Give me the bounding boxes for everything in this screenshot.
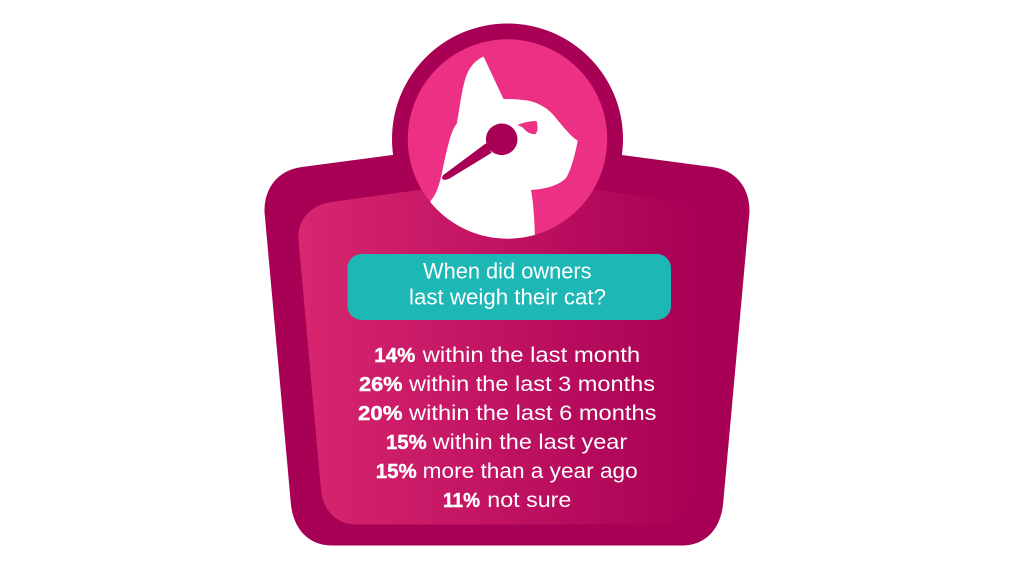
heading text line 2: last weigh their cat? <box>409 284 606 310</box>
panel: inner gradient shield <box>298 190 715 524</box>
heading text line 1: When did owners <box>423 258 592 284</box>
stat: 15% within the last year: within the last year <box>432 431 627 454</box>
stat: 11% not sure <box>443 489 571 512</box>
stat: 15% within the last year: 15% <box>386 431 427 454</box>
stat: 26% within the last 3 months: 26% <box>359 373 402 396</box>
stat list <box>358 344 656 512</box>
stat: 20% within the last 6 months: 20% <box>358 402 402 425</box>
icon: cat silhouette <box>430 56 578 239</box>
stat: 11% not sure: not sure <box>487 489 571 512</box>
heading box <box>348 254 671 320</box>
stat: 15% more than a year ago: more than a year ago <box>423 460 638 483</box>
stat: 14% within the last month: 14% <box>374 344 415 367</box>
circle: pink background <box>408 39 607 239</box>
stat: 20% within the last 6 months: within the last 6 months <box>408 402 656 425</box>
stat: 26% within the last 3 months: within the last 3 months <box>408 373 655 396</box>
icon: scale dial and needle <box>442 124 518 180</box>
icon: cat with weighing scale dial <box>408 39 607 250</box>
panel: outer shield <box>264 155 750 546</box>
stat: 14% within the last month: within the last month <box>422 344 640 367</box>
stat: 11% not sure: 11% <box>443 489 480 512</box>
circle: dark ring <box>392 24 623 254</box>
icon: cat eye <box>517 121 537 134</box>
stat: 15% more than a year ago: 15% <box>376 460 417 483</box>
